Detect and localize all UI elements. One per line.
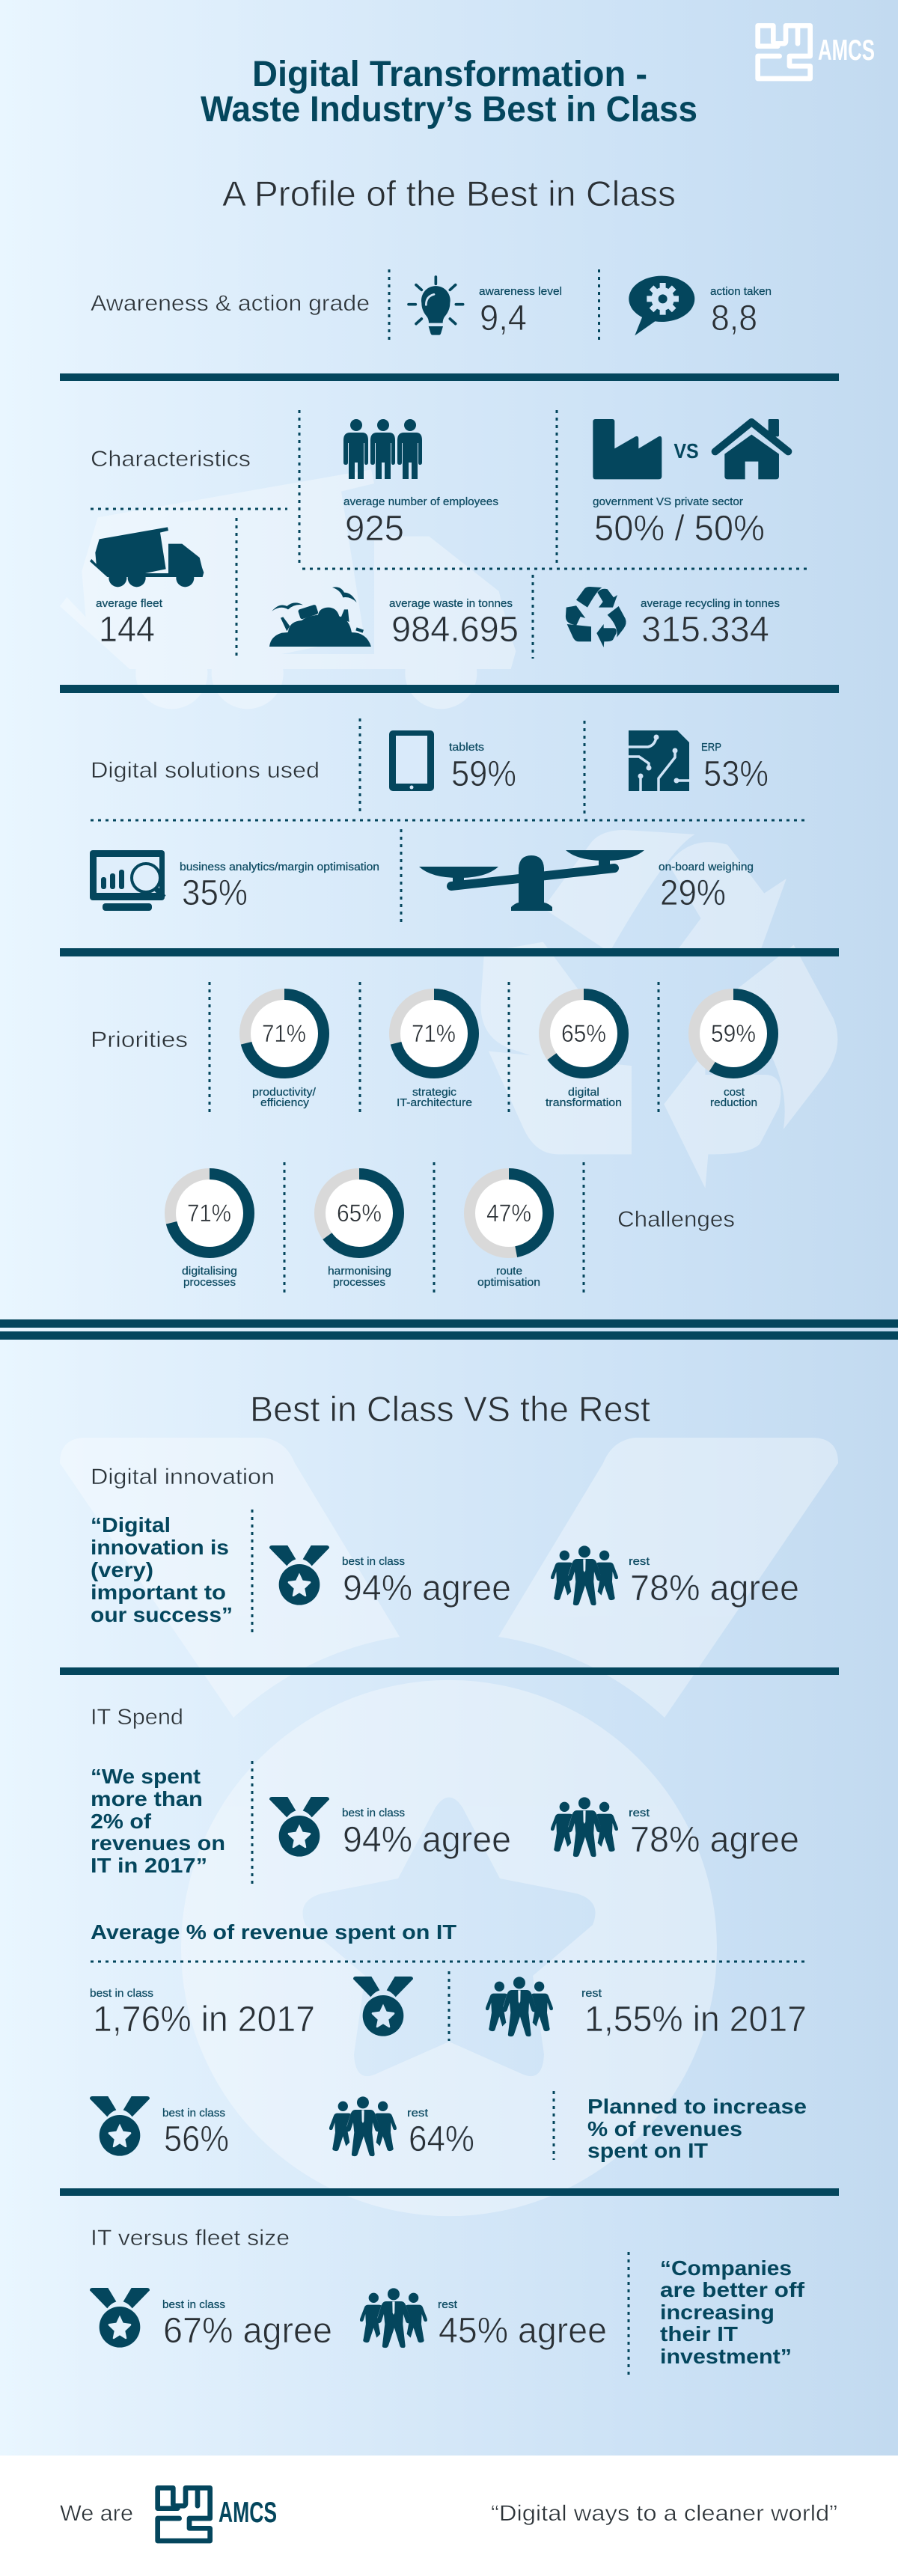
donut: digitalising processes 71%: 71% — [187, 1200, 231, 1227]
ghost recycle watermark — [480, 830, 837, 1188]
donut: digitalising processes 71%: digitalising — [182, 1266, 237, 1278]
heading: profile: A Profile of the Best in Class — [222, 174, 676, 213]
donut: harmonising processes 65%: 65% — [337, 1200, 382, 1227]
callout: planned to increase: % of revenues — [587, 2117, 742, 2140]
icon: weighing scale — [419, 850, 644, 911]
icon: speech bubble with gear — [629, 276, 694, 335]
stat: average fleet: 144 — [99, 610, 155, 650]
stat: rest 78%: 78% agree — [630, 1569, 799, 1608]
icon: medal — [269, 1797, 329, 1857]
label: characteristics: Characteristics — [91, 447, 251, 471]
donut: productivity 71%: 71% — [262, 1020, 306, 1047]
callout: planned to increase: spent on IT — [587, 2139, 708, 2162]
quote: digital innovation — [91, 1513, 233, 1626]
quote: companies better off: “Companies — [660, 2256, 792, 2280]
ghost truck watermark — [60, 469, 516, 709]
stat: rest 78%: rest — [629, 1556, 650, 1568]
donut: digitalising processes 71% — [171, 1173, 248, 1289]
label: IT versus fleet size: IT versus fleet size — [91, 2226, 290, 2250]
icon: medal — [353, 1977, 413, 2036]
quote: digital innovation: important to — [91, 1581, 226, 1604]
stat: employees: 925 — [345, 509, 404, 549]
label: IT spend: IT Spend — [91, 1705, 183, 1730]
stat: best in class 67%: 67% agree — [163, 2311, 332, 2351]
donut: digital transformation 65%: transformation — [546, 1097, 622, 1109]
quote: companies better off: investment” — [660, 2345, 792, 2368]
donut: harmonising processes 65%: harmonising — [328, 1266, 391, 1278]
donut: productivity 71% — [245, 994, 323, 1109]
panel: characteristics — [90, 410, 809, 659]
donut: productivity 71%: productivity/ — [252, 1087, 317, 1099]
stat: average waste: 984.695 — [391, 610, 519, 650]
label: priorities: Priorities — [91, 1028, 188, 1052]
stat: business analytics: business analytics/margin optimisation — [180, 861, 379, 873]
icon: factory vs house: VS — [674, 439, 699, 463]
stat: business analytics: 35% — [182, 873, 248, 913]
donut: digital transformation 65%: digital — [568, 1087, 599, 1099]
icon: dump truck — [90, 527, 204, 587]
icon: medal — [269, 1545, 329, 1605]
panel: priorities — [91, 982, 772, 1113]
donut: digital transformation 65%: 65% — [561, 1020, 606, 1047]
quote: IT spend: revenues on — [91, 1831, 225, 1855]
quote: companies better off: are better off — [660, 2278, 805, 2301]
icon: ERP circuit — [629, 730, 689, 791]
stat: awareness level: awareness level — [479, 286, 562, 298]
icon: factory vs house — [593, 419, 788, 479]
quote: IT spend: “We spent — [91, 1765, 201, 1788]
stat: rest 1,55%: rest — [581, 1988, 602, 2000]
icon: recycling — [566, 587, 626, 647]
footer band — [0, 2456, 898, 2576]
panel: digital innovation — [91, 1465, 799, 1633]
panel: awareness and action — [91, 269, 772, 340]
icon: people — [360, 2288, 427, 2348]
label: digital innovation: Digital innovation — [91, 1465, 275, 1489]
icon: analytics monitor — [90, 850, 165, 911]
title: Waste Industry’s Best in Class — [201, 90, 697, 129]
slogan: “Digital ways to a cleaner world” — [491, 2501, 837, 2526]
donut: digital transformation 65% — [545, 994, 623, 1109]
stat: action taken: 8,8 — [711, 299, 757, 338]
stat: action taken: action taken — [710, 286, 772, 298]
quote: IT spend: IT in 2017” — [91, 1854, 207, 1877]
stat: best in class 56%: best in class — [162, 2108, 225, 2119]
ghost medal watermark — [60, 1438, 838, 2216]
stat: government vs private: government VS private sector — [593, 496, 743, 508]
stat: rest 1,55%: 1,55% in 2017 — [584, 2000, 807, 2039]
quote: IT spend: more than — [91, 1787, 203, 1810]
logo: AMCS white — [758, 25, 875, 79]
icon: waste heap — [269, 587, 371, 647]
stat: rest 78%: rest — [629, 1807, 650, 1819]
stat: rest 78%: 78% agree — [630, 1820, 799, 1860]
stat: tablets: 59% — [451, 754, 516, 794]
stat: best in class 94%: 94% agree — [343, 1569, 511, 1608]
quote: IT spend — [91, 1765, 225, 1877]
stat: awareness level — [479, 286, 562, 338]
callout: planned to increase: Planned to increase — [587, 2095, 807, 2118]
stat: awareness level: 9,4 — [480, 299, 527, 338]
stat: best in class 94%: best in class — [342, 1807, 405, 1819]
stat: average recycling: 315.334 — [641, 610, 769, 650]
stat: best in class 1,76%: 1,76% in 2017 — [93, 2000, 315, 2039]
donut: productivity 71%: efficiency — [260, 1097, 310, 1109]
quote: companies better off: their IT — [660, 2322, 738, 2345]
stat: rest 45%: 45% agree — [439, 2311, 607, 2351]
donut: digitalising processes 71%: processes — [183, 1277, 236, 1289]
quote: companies better off — [660, 2256, 805, 2368]
stat: average fleet — [96, 598, 162, 650]
stat: average waste: average waste in tonnes — [389, 598, 513, 610]
icon: medal — [90, 2096, 150, 2156]
panel: digital solutions — [90, 718, 804, 923]
title: Digital Transformation - — [252, 55, 647, 94]
icon: people — [551, 1545, 618, 1605]
donut: route optimisation 47%: 47% — [486, 1200, 531, 1227]
stat: best in class 94%: best in class — [342, 1556, 405, 1568]
donut: strategic IT-architecture 71%: IT-architecture — [397, 1097, 472, 1109]
quote: digital innovation: “Digital — [91, 1513, 171, 1536]
donut: cost reduction 59% — [694, 994, 772, 1109]
donut: cost reduction 59%: 59% — [711, 1020, 756, 1047]
stat: average recycling: average recycling in tonnes — [641, 598, 780, 610]
donut: route optimisation 47% — [470, 1173, 548, 1289]
label: awareness and action grade: Awareness & action grade — [91, 291, 370, 316]
stat: government vs private: 50% / 50% — [594, 509, 765, 549]
quote: digital innovation: our success” — [91, 1603, 233, 1626]
heading: best in class vs the rest: Best in Class VS the Rest — [250, 1389, 650, 1429]
panel: IT versus fleet size — [90, 2226, 805, 2375]
stat: on-board weighing: 29% — [660, 873, 726, 913]
stat: best in class 56% — [162, 2108, 229, 2159]
donut: strategic IT-architecture 71%: strategic — [412, 1087, 456, 1099]
panel: IT spend — [90, 1705, 807, 2162]
stat: best in class 56%: 56% — [164, 2119, 229, 2159]
icon: people — [329, 2096, 397, 2156]
stat: employees — [343, 496, 498, 549]
stat: ERP: ERP — [701, 742, 721, 754]
donut: strategic IT-architecture 71%: 71% — [412, 1020, 456, 1047]
logo: AMCS dark: AMCS — [219, 2497, 277, 2529]
quote: companies better off: increasing — [660, 2301, 775, 2324]
quote: digital innovation: (very) — [91, 1558, 153, 1581]
donut: harmonising processes 65% — [320, 1173, 398, 1289]
title — [201, 55, 697, 129]
stat: best in class 1,76%: best in class — [90, 1988, 153, 2000]
label: challenges: Challenges — [617, 1207, 735, 1232]
stat: tablets: tablets — [449, 742, 484, 754]
logo: AMCS dark — [158, 2488, 277, 2541]
text: we are: We are — [60, 2501, 133, 2526]
icon: three employees — [343, 419, 422, 479]
donut: harmonising processes 65%: processes — [333, 1277, 385, 1289]
donut: route optimisation 47%: optimisation — [477, 1277, 540, 1289]
stat: employees: average number of employees — [343, 496, 498, 508]
icon: people — [551, 1797, 618, 1857]
stat: rest 64%: 64% — [409, 2119, 474, 2159]
icon: tablet — [389, 730, 434, 791]
callout: planned to increase — [587, 2095, 807, 2162]
panel: challenges — [171, 1162, 735, 1292]
stat: ERP: 53% — [703, 754, 769, 794]
stat: on-board weighing: on-board weighing — [659, 861, 754, 873]
stat: business analytics — [180, 861, 379, 913]
subheading: average revenue spent on IT: Average % of revenue spent on IT — [91, 1920, 456, 1944]
label: digital solutions used: Digital solutions used — [91, 758, 320, 783]
icon: people — [486, 1977, 553, 2036]
stat: tablets — [449, 742, 516, 794]
stat: average fleet: average fleet — [96, 598, 162, 610]
stat: rest 64%: rest — [407, 2108, 428, 2119]
footer — [60, 2488, 837, 2541]
quote: IT spend: 2% of — [91, 1810, 152, 1833]
stat: on-board weighing — [659, 861, 754, 913]
stat: ERP — [701, 742, 769, 794]
donut: cost reduction 59%: reduction — [710, 1097, 757, 1109]
donut: strategic IT-architecture 71% — [395, 994, 473, 1109]
donut: route optimisation 47%: route — [496, 1266, 522, 1278]
stat: action taken — [710, 286, 772, 338]
stat: best in class 67%: best in class — [162, 2299, 225, 2311]
icon: medal — [90, 2288, 150, 2348]
icon: light bulb — [409, 277, 463, 335]
donut: cost reduction 59%: cost — [724, 1087, 745, 1099]
stat: best in class 94%: 94% agree — [343, 1820, 511, 1860]
stat: rest 45%: rest — [438, 2299, 457, 2311]
quote: digital innovation: innovation is — [91, 1536, 229, 1559]
